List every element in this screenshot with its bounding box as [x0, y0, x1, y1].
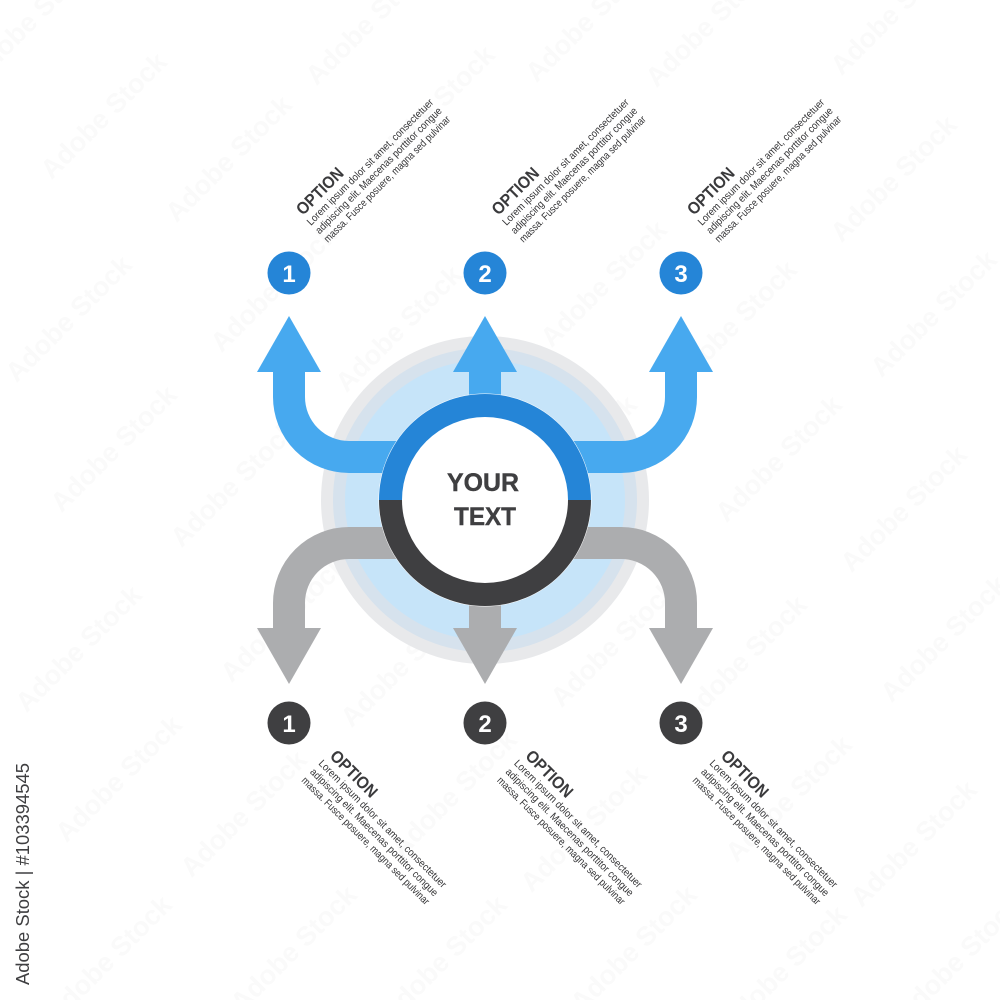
bottom text block 3: adipiscing elit. Maecenas porttitor congue: [698, 766, 831, 899]
watermark pattern: Adobe Stock: [335, 594, 473, 733]
watermark pattern: Adobe Stock: [515, 759, 653, 898]
gray arrow 2: [453, 595, 517, 684]
watermark pattern: Adobe Stock: [385, 724, 523, 863]
watermark pattern: Adobe Stock: [845, 774, 983, 913]
watermark pattern: Adobe Stock: [45, 379, 183, 518]
watermark pattern: Adobe Stock: [0, 249, 138, 388]
top text block 3: Lorem ipsum dolor sit amet, consectetuer: [696, 96, 827, 228]
watermark pattern: Adobe Stock: [865, 244, 1000, 383]
top badge 3: 3: [674, 261, 688, 288]
center ring and label: TEXT: [454, 503, 516, 531]
bottom text block 1: Lorem ipsum dolor sit amet, consectetuer: [316, 758, 449, 891]
bottom badge 2: 2: [478, 711, 492, 738]
bottom badge 3: 3: [674, 711, 688, 738]
bottom text block 2: OPTION: [522, 746, 577, 802]
watermark pattern: Adobe Stock: [165, 414, 303, 553]
watermark pattern: Adobe Stock: [720, 729, 858, 868]
top text block 3: OPTION: [683, 164, 739, 219]
watermark pattern: Adobe Stock: [675, 589, 813, 728]
watermark pattern: Adobe Stock: [825, 109, 963, 248]
top text block 3: massa. Fusce posuere, magna sed pulvinar: [713, 113, 844, 245]
bottom badge 2: [464, 702, 506, 744]
top text block 1: OPTION: [292, 164, 348, 219]
top text block 2: OPTION: [488, 164, 543, 219]
bottom badge 1: [268, 702, 310, 744]
gray arrow 3: [570, 543, 713, 684]
top badge 2: 2: [478, 261, 492, 288]
top text block 1: massa. Fusce posuere, magna sed pulvinar: [322, 113, 453, 245]
top badge 3: [660, 252, 702, 294]
blue arrow 1: [257, 316, 400, 457]
background concentric circles: [321, 336, 649, 664]
watermark pattern: Adobe Stock: [160, 89, 298, 228]
watermark pattern: Adobe Stock: [545, 574, 683, 713]
watermark pattern: Adobe Stock: [35, 46, 173, 185]
watermark pattern: Adobe Stock: [835, 439, 973, 578]
watermark pattern: Adobe Stock: [205, 219, 343, 358]
blue arrow 3: [570, 316, 713, 457]
watermark pattern: Adobe Stock: [50, 709, 188, 848]
top text block 2: massa. Fusce posuere, magna sed pulvinar: [517, 113, 649, 245]
top text block 1: Lorem ipsum dolor sit amet, consectetuer: [305, 96, 436, 228]
bottom badge 3: [660, 702, 702, 744]
top text block 1: adipiscing elit. Maecenas porttitor congue: [313, 105, 445, 237]
bottom badge 1: 1: [282, 711, 296, 738]
watermark pattern: Adobe Stock: [175, 744, 313, 883]
bottom text block 3: massa. Fusce posuere, magna sed pulvinar: [690, 775, 823, 908]
bottom text block 2: Lorem ipsum dolor sit amet, consectetuer: [511, 758, 645, 891]
top text block 2: Lorem ipsum dolor sit amet, consectetuer: [500, 96, 632, 228]
top text block 3: adipiscing elit. Maecenas porttitor congue: [704, 105, 836, 237]
bottom text block 1: adipiscing elit. Maecenas porttitor congue: [307, 766, 440, 899]
bottom text block 1: massa. Fusce posuere, magna sed pulvinar: [299, 775, 432, 908]
gray arrow 1: [257, 543, 400, 684]
stock credit: Adobe Stock | #103394545: [13, 763, 33, 985]
bottom text block 3: Lorem ipsum dolor sit amet, consectetuer: [707, 758, 840, 891]
bottom text block 3: OPTION: [717, 746, 772, 802]
bottom text block 2: massa. Fusce posuere, magna sed pulvinar: [494, 775, 628, 908]
watermark pattern: Adobe Stock: [330, 259, 468, 398]
top badge 1: [268, 252, 310, 294]
watermark pattern: Adobe Stock: [505, 389, 643, 528]
center ring and label: [378, 394, 592, 606]
blue arrow 2: [453, 316, 517, 405]
center ring and label: YOUR: [447, 469, 519, 497]
watermark pattern: Adobe Stock: [363, 39, 501, 178]
watermark pattern: Adobe Stock: [665, 254, 803, 393]
top badge 2: [464, 252, 506, 294]
top badge 1: 1: [282, 261, 296, 288]
bottom text block 2: adipiscing elit. Maecenas porttitor congue: [503, 766, 636, 899]
top text block 2: adipiscing elit. Maecenas porttitor congue: [509, 105, 640, 237]
watermark pattern: Adobe Stock: [215, 549, 353, 688]
watermark pattern: Adobe Stock: [535, 214, 673, 353]
watermark pattern: Adobe Stock: [10, 579, 148, 718]
watermark pattern: Adobe Stock: [710, 389, 848, 528]
bottom text block 1: OPTION: [326, 746, 381, 802]
